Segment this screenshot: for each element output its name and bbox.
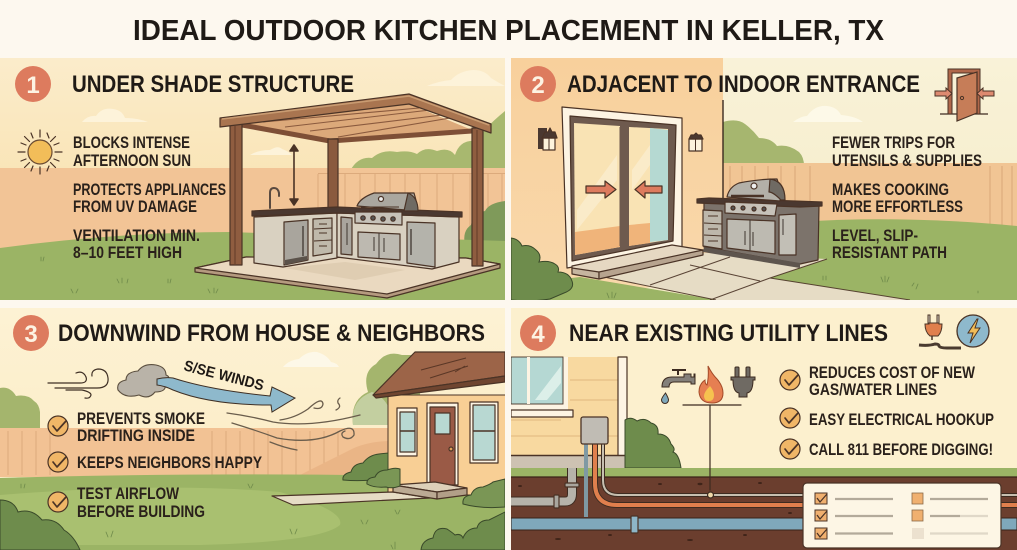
grass tufts — [607, 276, 978, 298]
icon: flame — [699, 366, 723, 403]
pergola — [220, 94, 491, 266]
text: effortless: MORE EFFORTLESS — [832, 197, 963, 216]
title: IDEAL OUTDOOR KITCHEN PLACEMENT IN KELLER, TX — [133, 15, 885, 47]
text: blocks sun: AFTERNOON SUN — [73, 151, 191, 170]
heading 3: DOWNWIND FROM HOUSE & NEIGHBORS — [58, 320, 485, 347]
icon: power plug and bolt — [919, 315, 989, 348]
text: reduces cost: REDUCES COST OF NEW — [809, 363, 976, 382]
panel: downwind from house and neighbors — [0, 308, 508, 550]
check icon 2 — [48, 452, 68, 472]
gray pipe — [511, 468, 579, 508]
text: protects appliances — [74, 184, 226, 212]
panel: under shade structure — [0, 58, 505, 300]
text: protects appliances: FROM UV DAMAGE — [73, 197, 197, 216]
text: fewer trips — [832, 136, 982, 166]
text: ventilation: 8–10 FEET HIGH — [73, 243, 182, 262]
sliding door — [562, 107, 682, 268]
blue water pipe — [511, 516, 1017, 533]
bush — [511, 238, 573, 301]
bushes — [0, 453, 505, 550]
cloud of smoke — [118, 365, 169, 397]
grill island — [697, 179, 822, 268]
text: level path — [832, 230, 946, 258]
house — [373, 352, 508, 495]
text: protects appliances: PROTECTS APPLIANCES — [73, 180, 226, 199]
icon: sun — [18, 130, 62, 174]
text: reduces cost — [809, 363, 976, 399]
number badge 2 — [520, 66, 556, 102]
text: fewer trips: FEWER TRIPS FOR — [832, 133, 955, 152]
utility meter — [581, 417, 608, 444]
slab — [195, 257, 500, 298]
icon: door with arrows — [935, 69, 994, 121]
check icon 3 — [48, 492, 68, 512]
text: ventilation: VENTILATION MIN. — [73, 226, 200, 245]
icon: faucet — [662, 370, 695, 404]
text: ventilation — [73, 230, 199, 258]
conduit to meter — [584, 443, 588, 517]
icon: plug — [731, 367, 755, 397]
wall — [511, 58, 723, 290]
grass tufts — [21, 484, 400, 549]
wind lines — [48, 369, 108, 398]
number badge 3: 3 — [24, 321, 38, 348]
number badge 1: 1 — [26, 72, 40, 99]
height arrow — [290, 145, 298, 205]
walkway and step — [272, 482, 467, 505]
text: effortless — [832, 184, 962, 212]
text: test airflow — [77, 484, 205, 521]
soil — [511, 477, 1017, 550]
check icon 2 — [780, 408, 800, 428]
concrete path — [604, 253, 910, 300]
text: fewer trips: UTENSILS & SUPPLIES — [832, 151, 982, 170]
house wall — [511, 357, 627, 468]
text: test airflow: TEST AIRFLOW — [77, 484, 180, 503]
text: prevents smoke — [77, 409, 205, 445]
text: reduces cost: GAS/WATER LINES — [809, 380, 937, 399]
door step — [572, 245, 703, 279]
wind arrow — [157, 378, 295, 412]
gas and electric lines — [595, 443, 1017, 505]
number badge 4: 4 — [531, 321, 545, 348]
panel: adjacent to indoor entrance — [511, 58, 1017, 301]
connector line from icons — [683, 405, 741, 498]
panel: near existing utility lines — [511, 308, 1017, 550]
text: effortless: MAKES COOKING — [832, 180, 949, 199]
wall lamps — [538, 128, 703, 151]
heading 2: ADJACENT TO INDOOR ENTRANCE — [567, 71, 920, 98]
heading 4: NEAR EXISTING UTILITY LINES — [569, 320, 888, 347]
grass strip — [511, 468, 1017, 477]
grass tufts — [41, 257, 218, 293]
text: test airflow: BEFORE BUILDING — [77, 502, 205, 521]
outdoor kitchen with grill — [252, 188, 462, 269]
text: level path: LEVEL, SLIP- — [832, 226, 918, 245]
text: blocks sun: BLOCKS INTENSE — [73, 133, 190, 152]
check icon 3 — [780, 439, 800, 459]
bush — [625, 418, 681, 468]
check icon 1 — [780, 370, 800, 390]
arrows into door — [586, 181, 662, 198]
number badge 1 — [15, 66, 51, 102]
text: prevents smoke: DRIFTING INSIDE — [77, 426, 195, 445]
check icon 1 — [48, 416, 68, 436]
text: blocks sun — [73, 136, 190, 166]
number badge 2: 2 — [531, 72, 545, 99]
number badge 4 — [520, 315, 556, 351]
number badge 3 — [13, 315, 49, 351]
text: prevents smoke: PREVENTS SMOKE — [77, 409, 205, 428]
text: level path: RESISTANT PATH — [832, 243, 947, 262]
wind label: S/SE WINDS — [182, 357, 266, 394]
text: neighbors happy: KEEPS NEIGHBORS HAPPY — [77, 453, 263, 472]
smoke swirls — [227, 398, 360, 450]
heading 1: UNDER SHADE STRUCTURE — [72, 71, 354, 98]
checklist card — [803, 483, 1001, 548]
